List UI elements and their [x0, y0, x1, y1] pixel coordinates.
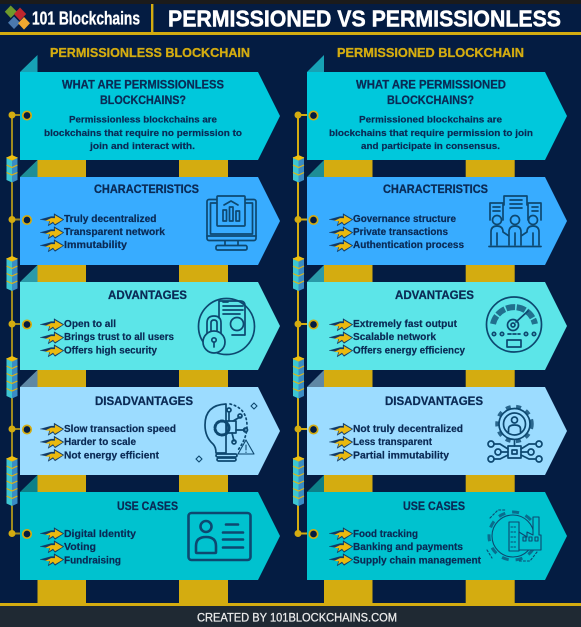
heading: ADVANTAGES — [395, 290, 474, 302]
icon: id card — [188, 513, 250, 560]
heading: WHAT ARE PERMISSIONLESS — [62, 80, 224, 92]
header — [0, 4, 581, 35]
heading — [356, 80, 506, 107]
heading: WHAT ARE PERMISSIONED — [356, 80, 506, 92]
footer credit: CREATED BY 101BLOCKCHAINS.COM — [197, 612, 397, 624]
list: Not truly decentralized — [353, 424, 463, 435]
column heading: permissionless: PERMISSIONLESS BLOCKCHAIN — [50, 45, 250, 60]
icon: people and city — [489, 196, 541, 246]
block stack 2 — [6, 256, 18, 291]
logo mark — [5, 6, 30, 30]
block stack 1 — [6, 155, 18, 182]
list: Slow transaction speed — [64, 424, 176, 435]
panel: characteristics left — [20, 160, 280, 265]
list: Open to all — [64, 319, 116, 330]
list — [40, 528, 137, 566]
list: Digital Identity — [64, 529, 137, 540]
list: Private transactions — [353, 227, 449, 238]
icon: speedometer — [486, 297, 542, 352]
list: Truly decentralized — [64, 214, 157, 225]
icon: light bulb with circuit — [196, 403, 257, 462]
heading: BLOCKCHAINS? — [387, 95, 474, 107]
description: blockchains that require no permission to — [44, 128, 242, 139]
heading: CHARACTERISTICS — [94, 184, 199, 196]
panel: use cases right — [307, 475, 567, 580]
heading: USE CASES — [403, 501, 465, 513]
list: Immutability — [64, 240, 128, 251]
list — [329, 318, 466, 357]
logo wordmark: 101 Blockchains — [32, 8, 140, 28]
list — [329, 528, 482, 566]
icon: gear with factory — [487, 510, 541, 561]
icon: gear with person and circuit — [488, 406, 542, 462]
list — [40, 423, 176, 462]
list: Offers energy efficiency — [353, 346, 466, 356]
list: Authentication process — [353, 240, 465, 251]
list: Scalable network — [353, 332, 437, 343]
block stack 3 — [6, 356, 18, 398]
panel: advantages right — [307, 265, 567, 370]
block stack 4 — [293, 456, 304, 506]
list — [40, 318, 175, 357]
list: Extremely fast output — [353, 319, 458, 330]
description: join and interact with. — [89, 141, 195, 152]
heading: CHARACTERISTICS — [383, 184, 488, 196]
description: Permissioned blockchains are — [359, 114, 502, 126]
icon: lock and document — [198, 298, 254, 354]
list: Voting — [64, 542, 96, 553]
icon: monitor with chart — [207, 196, 256, 250]
footer — [0, 603, 581, 627]
list: Banking and payments — [353, 542, 464, 553]
panel: disadvantages left — [20, 370, 280, 475]
list: Food tracking — [353, 529, 418, 540]
list: Offers high security — [64, 346, 158, 356]
timeline right — [293, 112, 313, 537]
list: Harder to scale — [64, 437, 137, 448]
list: Fundraising — [64, 556, 121, 566]
list — [40, 214, 166, 252]
heading: ADVANTAGES — [108, 290, 187, 302]
heading: BLOCKCHAINS? — [100, 95, 186, 107]
panel: advantages left — [20, 265, 280, 370]
description: blockchains that require permission to join — [329, 128, 533, 139]
description: Permissionless blockchains are — [69, 114, 217, 126]
timeline left — [6, 112, 27, 537]
description: and participate in consensus. — [361, 141, 500, 152]
list: Supply chain management — [353, 556, 482, 566]
heading — [62, 80, 224, 107]
heading: DISADVANTAGES — [95, 396, 193, 408]
list — [329, 214, 465, 252]
list: Less transparent — [353, 437, 433, 448]
description — [329, 114, 533, 152]
description — [44, 114, 242, 152]
block stack 3 — [293, 356, 304, 398]
panel: use cases left — [20, 475, 280, 580]
panel: what are permissionless blockchains — [20, 55, 280, 160]
heading: USE CASES — [117, 501, 178, 513]
block stack 1 — [293, 155, 304, 182]
list: Partial immutability — [353, 450, 450, 462]
list: Transparent network — [64, 227, 166, 238]
column heading: permissioned: PERMISSIONED BLOCKCHAIN — [337, 45, 524, 60]
list — [329, 423, 463, 462]
heading: DISADVANTAGES — [385, 396, 483, 408]
list: Not energy efficient — [64, 450, 160, 462]
list: Governance structure — [353, 214, 457, 225]
title: PERMISSIONED VS PERMISSIONLESS — [168, 6, 561, 32]
block stack 4 — [6, 456, 18, 506]
block stack 2 — [293, 256, 304, 291]
gold pillars — [38, 155, 515, 603]
panel: characteristics right — [307, 160, 567, 265]
list: Brings trust to all users — [64, 332, 175, 343]
panel: disadvantages right — [307, 370, 567, 475]
panel: what are permissioned blockchains — [307, 55, 567, 160]
